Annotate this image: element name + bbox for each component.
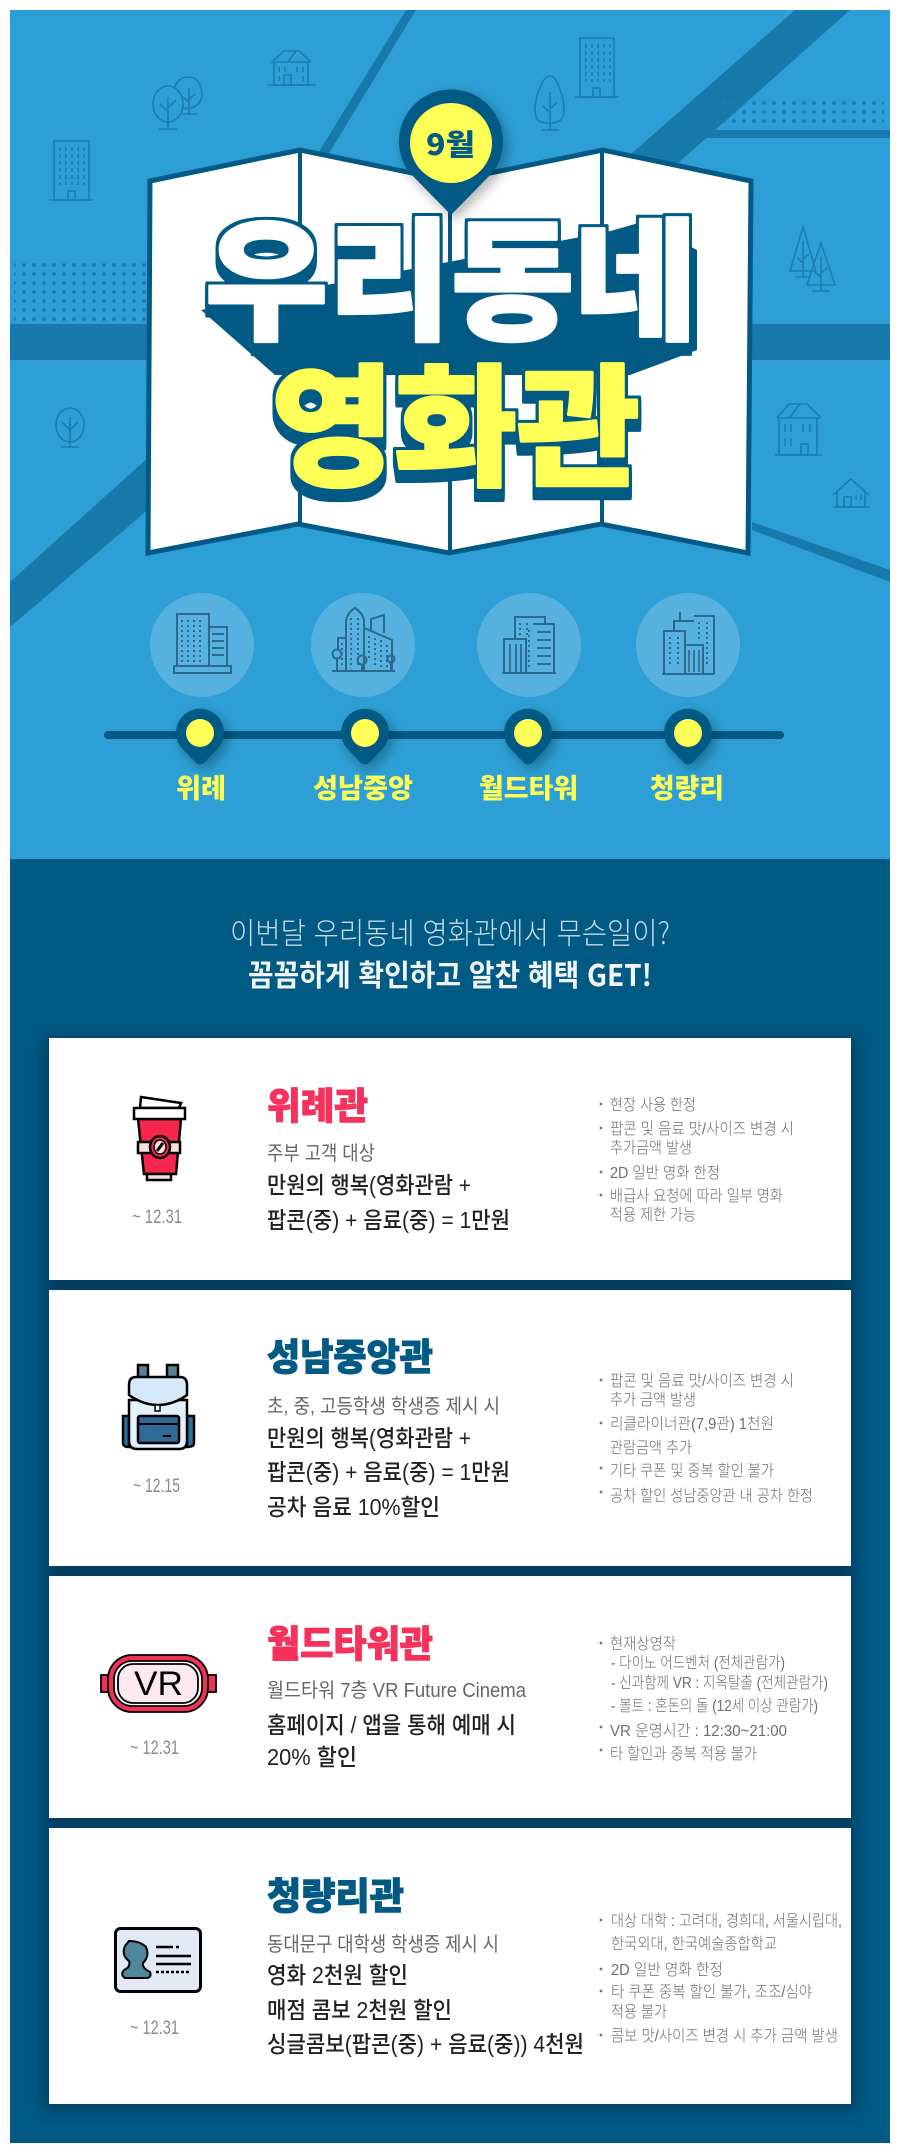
conditions: - 신과함께 VR : 지옥탈출 (전체관람가) — [611, 1674, 828, 1692]
circle: 위례 building — [150, 593, 254, 697]
folded map — [148, 150, 751, 553]
offer — [267, 1142, 510, 1233]
circle: 청량리 building — [636, 593, 740, 697]
icon: small house — [833, 479, 870, 507]
circle: 성남중앙 building — [311, 593, 415, 697]
title shadow block — [201, 222, 697, 375]
title: 영화관: 영화관 — [271, 323, 640, 514]
panel: dark section background — [10, 859, 890, 2143]
pin: 성남중앙 — [341, 709, 389, 764]
panel: 위례관 — [49, 1038, 851, 1280]
intro heading: 꼼꼼하게 확인하고 알찬 혜택 GET! — [248, 951, 652, 995]
map roads — [10, 10, 890, 627]
branch labels: 월드타워 — [479, 767, 578, 806]
pin: 청량리 — [664, 709, 712, 764]
offer: 홈페이지 / 앱을 통해 예매 시 — [267, 1712, 516, 1738]
circle: 월드타워 building — [477, 593, 581, 697]
offer: 싱글콤보(팝콘(중) + 음료(중)) 4천원 — [267, 2031, 584, 2057]
panel: 성남중앙관 — [49, 1290, 851, 1566]
offer: 초, 중, 고등학생 학생증 제시 시 — [267, 1395, 500, 1418]
conditions: VR 운영시간 : 12:30~21:00 — [610, 1722, 787, 1740]
icon: building left — [49, 141, 93, 200]
icon: backpack — [123, 1365, 194, 1449]
branch labels: 위례 — [176, 767, 226, 806]
date: ~ 12.31 — [132, 1207, 182, 1228]
conditions: 적용 제한 가능 — [610, 1206, 696, 1224]
icon: twin trees — [153, 77, 202, 129]
dot patterns — [14, 97, 884, 321]
conditions: 2D 일반 영화 한정 — [610, 1164, 720, 1182]
intro heading — [230, 909, 670, 995]
icon: student ID card — [116, 1928, 200, 1992]
offer: 매점 콤보 2천원 할인 — [267, 1997, 452, 2023]
icon: pine trees — [790, 227, 835, 291]
branch labels — [176, 767, 724, 806]
pin: 위례 — [176, 709, 224, 764]
branch labels: 청량리 — [650, 767, 724, 806]
conditions — [600, 1096, 794, 1224]
conditions: 현재상영작 — [610, 1635, 676, 1653]
conditions: - 다이노 어드벤처 (전체관람가) — [611, 1654, 785, 1672]
conditions: 적용 불가 — [611, 2003, 667, 2021]
conditions: 콤보 맛/사이즈 변경 시 추가 금액 발생 — [611, 2027, 838, 2045]
icon: small tree — [56, 408, 84, 447]
conditions: 관람금액 추가 — [610, 1439, 692, 1457]
conditions: 한국외대, 한국예술종합학교 — [611, 1935, 777, 1953]
heading: 성남중앙관 — [267, 1327, 433, 1381]
heading: 월드타워관 — [267, 1614, 433, 1668]
date: ~ 12.31 — [130, 1738, 179, 1759]
offer: 만원의 행복(영화관람 + — [267, 1172, 471, 1198]
date: ~ 12.15 — [133, 1476, 180, 1497]
heading: 위례관 — [267, 1076, 368, 1130]
map pin: 9월 — [399, 89, 503, 215]
icon: building top — [575, 38, 619, 97]
offer: 월드타워 7층 VR Future Cinema — [267, 1679, 527, 1702]
conditions: 타 쿠폰 중복 할인 불가, 조조/심야 — [611, 1983, 812, 2001]
offer: 팝콘(중) + 음료(중) = 1만원 — [267, 1207, 510, 1233]
offer: 공차 음료 10%할인 — [267, 1494, 440, 1520]
conditions: 팝콘 및 음료 맛/사이즈 변경 시 — [610, 1120, 794, 1138]
panel: 월드타워관 — [49, 1576, 851, 1818]
offer: 동대문구 대학생 학생증 제시 시 — [267, 1933, 499, 1956]
pin label: 9월 — [426, 122, 475, 164]
conditions: 기타 쿠폰 및 중복 할인 불가 — [610, 1462, 774, 1480]
conditions: 추가 금액 발생 — [610, 1391, 696, 1409]
conditions — [600, 1372, 813, 1505]
conditions: 대상 대학 : 고려대, 경희대, 서울시립대, — [611, 1912, 842, 1930]
conditions: 2D 일반 영화 한정 — [611, 1961, 723, 1979]
conditions: 현장 사용 한정 — [610, 1096, 696, 1114]
intro heading: 이번달 우리동네 영화관에서 무슨일이? — [230, 909, 670, 953]
VR label: VR — [134, 1665, 183, 1703]
icon: tall tree — [535, 76, 564, 130]
offer: 주부 고객 대상 — [267, 1142, 375, 1165]
panel: hero map background — [10, 10, 890, 859]
offer: 영화 2천원 할인 — [267, 1962, 408, 1988]
icon: VR headset — [101, 1655, 216, 1712]
offer: 팝콘(중) + 음료(중) = 1만원 — [267, 1459, 510, 1485]
offer: 만원의 행복(영화관람 + — [267, 1425, 471, 1451]
icon: house top — [267, 51, 316, 85]
card shadows — [44, 1038, 856, 2110]
offer — [267, 1395, 510, 1520]
conditions: 팝콘 및 음료 맛/사이즈 변경 시 — [610, 1372, 794, 1390]
conditions: 타 할인과 중복 적용 불가 — [610, 1745, 757, 1763]
title: 우리동네: 우리동네 — [205, 177, 697, 368]
conditions: 추가금액 발생 — [610, 1139, 692, 1157]
icon: house right — [775, 404, 822, 455]
conditions: - 볼트 : 혼돈의 돌 (12세 이상 관람가) — [611, 1697, 818, 1715]
offer — [267, 1933, 584, 2057]
branch labels: 성남중앙 — [313, 767, 413, 806]
conditions: 배급사 요청에 따라 일부 영화 — [610, 1187, 783, 1205]
conditions — [600, 1635, 828, 1763]
offer: 20% 할인 — [267, 1744, 357, 1770]
conditions — [600, 1912, 842, 2045]
panel: 청량리관 — [49, 1828, 851, 2104]
heading: 청량리관 — [267, 1866, 404, 1920]
date: ~ 12.31 — [130, 2018, 179, 2039]
conditions: 리클라이너관(7,9관) 1천원 — [610, 1415, 774, 1433]
branch circles with building icons — [150, 593, 740, 697]
route timeline — [104, 709, 784, 764]
icon: coffee cup — [134, 1097, 185, 1180]
conditions: 공차 할인 성남중앙관 내 공차 한정 — [610, 1487, 813, 1505]
pin: 월드타워 — [504, 709, 552, 764]
offer — [267, 1679, 527, 1770]
